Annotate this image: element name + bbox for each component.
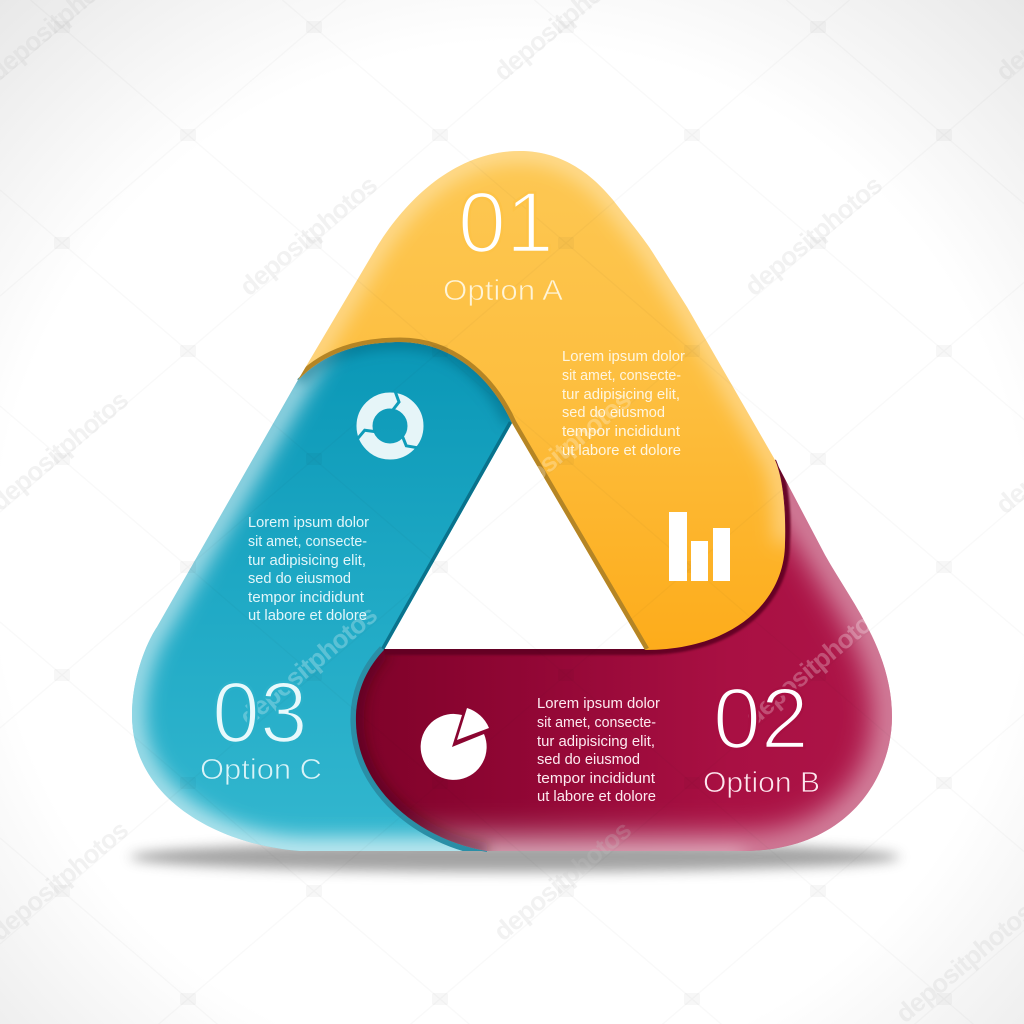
text block C: tur adipisicing elit, — [248, 553, 366, 569]
label Option A: Option A — [443, 275, 564, 307]
text block A: sed do eiusmod — [562, 405, 665, 421]
segment: teal ribbon 03 — [120, 330, 520, 862]
number 02: 02 — [713, 671, 809, 767]
icon: cycle arrows — [355, 391, 419, 452]
watermarks: depositphotos — [739, 599, 888, 732]
watermarks: depositphotos — [488, 814, 637, 947]
text block A: ut labore et dolore — [562, 443, 681, 459]
label Option C: Option C — [200, 754, 322, 786]
text block C: ut labore et dolore — [248, 608, 367, 624]
text block A: sit amet, consecte- — [562, 368, 681, 384]
text block A: Lorem ipsum dolor — [562, 349, 685, 365]
text block C: sed do eiusmod — [248, 571, 351, 587]
watermarks: depositphotos — [488, 384, 637, 517]
icon: pie chart — [421, 708, 489, 780]
number 03: 03 — [212, 665, 308, 761]
label Option B: Option B — [703, 767, 820, 799]
text block B: tur adipisicing elit, — [537, 734, 655, 750]
text block B — [537, 696, 660, 805]
icon: bar chart — [669, 512, 730, 581]
text block B: Lorem ipsum dolor — [537, 696, 660, 712]
segment: yellow ribbon 01 — [270, 151, 785, 650]
watermarks: depositphotos — [234, 169, 383, 302]
text block A: tur adipisicing elit, — [562, 387, 680, 403]
watermarks: depositphotos — [739, 169, 888, 302]
text block B: tempor incididunt — [537, 771, 655, 787]
text block B: sit amet, consecte- — [537, 715, 656, 731]
text block A — [562, 349, 685, 459]
text block C: Lorem ipsum dolor — [248, 515, 369, 531]
watermarks: depositphotos — [234, 599, 383, 732]
segment: magenta ribbon 02 — [356, 430, 892, 860]
number 01: 01 — [458, 175, 554, 271]
text block C: tempor incididunt — [248, 590, 364, 606]
text block C: sit amet, consecte- — [248, 534, 367, 550]
text block B: ut labore et dolore — [537, 789, 656, 805]
text block A: tempor incididunt — [562, 424, 680, 440]
ground shadow — [130, 842, 900, 872]
text block C — [248, 515, 369, 624]
text block B: sed do eiusmod — [537, 752, 640, 768]
